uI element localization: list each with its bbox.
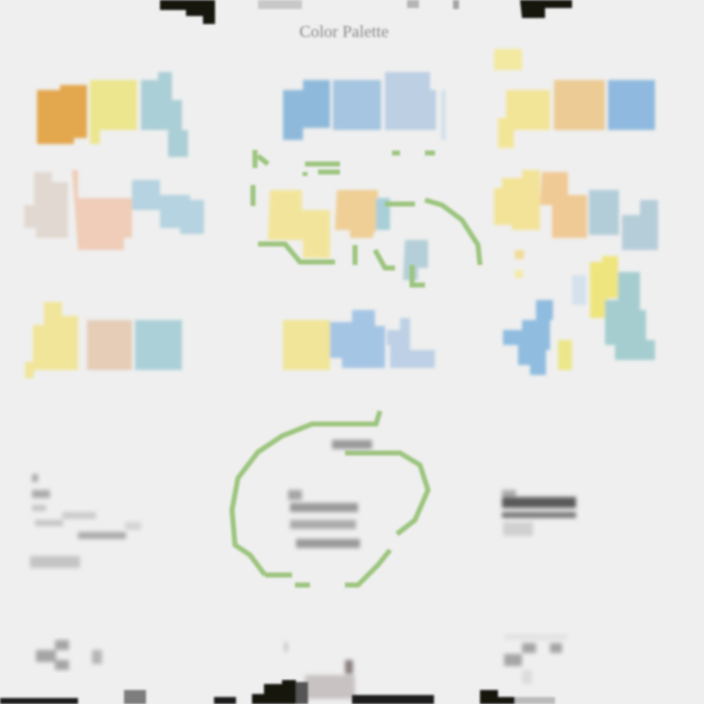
illegible footnote: center	[284, 642, 355, 699]
panel: scattered palette bottom right	[503, 256, 655, 375]
bottom edge artwork	[0, 680, 555, 704]
illegible text: left column	[30, 474, 141, 568]
panel: palette middle right	[494, 170, 658, 278]
panel: palette bottom center	[283, 310, 435, 370]
panel: palette middle center	[268, 190, 428, 280]
title: Color Palette	[299, 22, 389, 41]
top edge artwork	[160, 0, 572, 24]
panel: palette middle left	[24, 170, 204, 250]
panel: palette top center	[283, 72, 446, 140]
illegible text: right column	[502, 490, 576, 536]
illegible footnote: left	[36, 640, 102, 670]
panel: green annotation scribble	[253, 150, 480, 285]
panel: palette top right	[494, 49, 655, 148]
green loop annotation	[232, 411, 428, 585]
panel: palette top left	[37, 72, 188, 157]
panel: palette bottom left	[25, 302, 182, 378]
illegible text: center callout	[288, 440, 372, 548]
illegible footnote: right	[504, 634, 567, 684]
